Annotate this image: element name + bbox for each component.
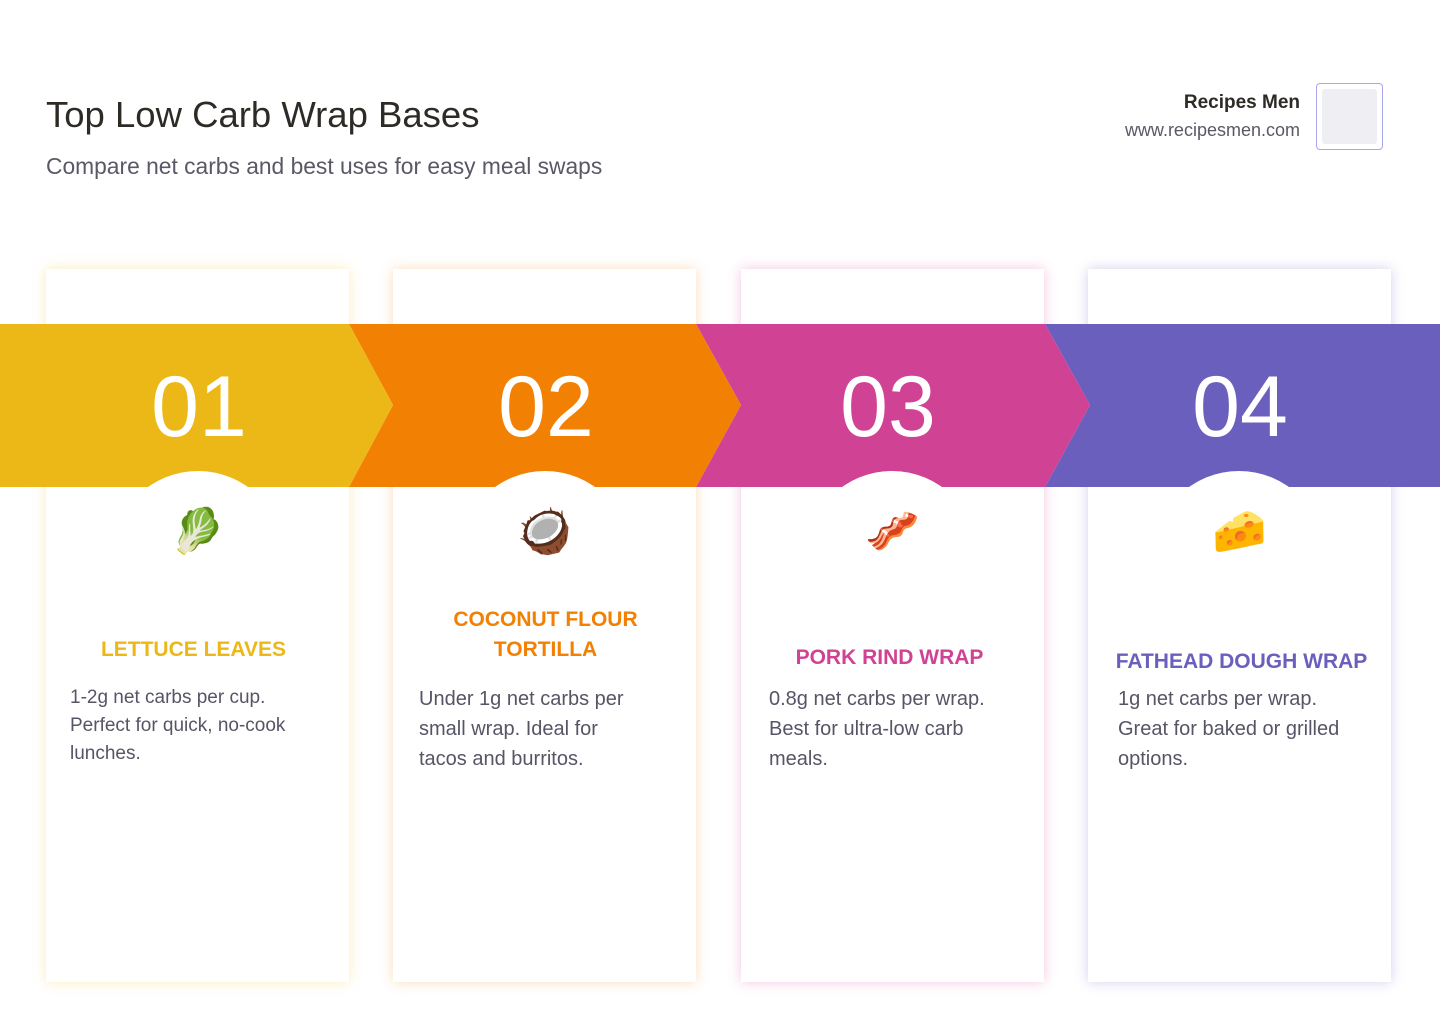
brand <box>1125 92 1300 140</box>
card 1 <box>46 269 349 982</box>
brand: Recipes Men <box>1184 92 1300 113</box>
icon: bacon: 🥓 <box>865 505 920 557</box>
arrow band: 03 <box>840 359 936 455</box>
title: Top Low Carb Wrap Bases <box>46 94 479 135</box>
card 2 <box>393 269 696 982</box>
logo box <box>1316 83 1383 150</box>
text 3: 0.8g net carbs per wrap. Best for ultra-low carb meals. <box>769 688 985 770</box>
arrow band: 02 <box>498 359 594 455</box>
arrow band: 04 <box>1192 359 1288 455</box>
heading 2: COCONUT FLOUR <box>453 608 638 631</box>
heading 2 <box>453 608 638 661</box>
icon: coconut: 🥥 <box>517 505 572 557</box>
icon: lettuce: 🥬 <box>170 505 225 557</box>
card 4 <box>1088 269 1391 982</box>
arrow band: 01 <box>151 359 247 455</box>
heading 3: PORK RIND WRAP <box>796 646 983 669</box>
heading 2: TORTILLA <box>494 638 597 661</box>
heading 4: FATHEAD DOUGH WRAP <box>1116 650 1367 673</box>
arrow band <box>0 324 1440 487</box>
heading 1: LETTUCE LEAVES <box>101 638 286 661</box>
brand: www.recipesmen.com <box>1125 120 1300 140</box>
icon: cheese: 🧀 <box>1212 505 1267 557</box>
text 4: 1g net carbs per wrap. Great for baked or grilled options. <box>1118 688 1339 770</box>
subtitle: Compare net carbs and best uses for easy meal swaps <box>46 153 602 179</box>
text 2: Under 1g net carbs per small wrap. Ideal for tacos and burritos. <box>419 688 624 770</box>
card 3 <box>741 269 1044 982</box>
text 1: 1-2g net carbs per cup. Perfect for quick, no-cook lunches. <box>70 687 285 764</box>
